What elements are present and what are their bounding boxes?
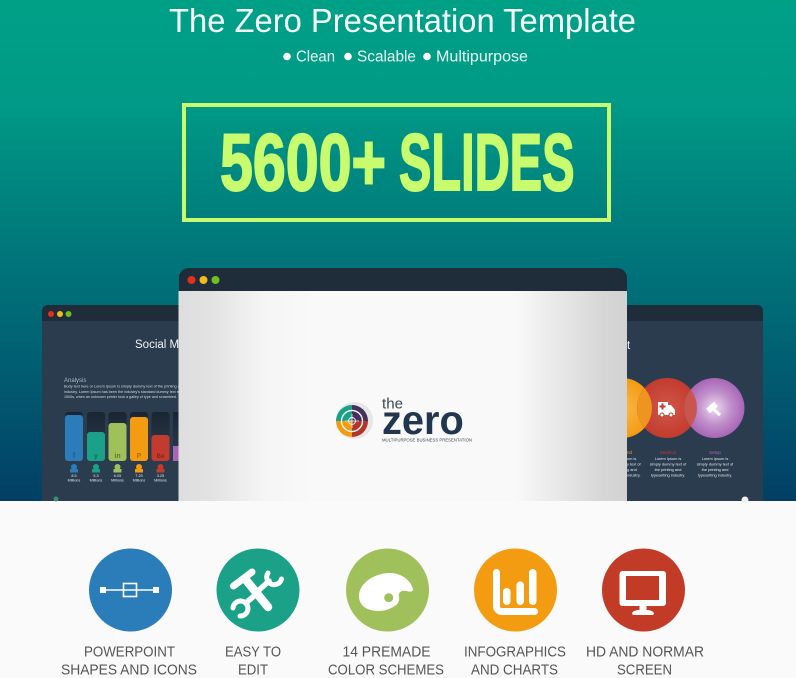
- subtitle bullets: Multipurpose: [436, 48, 528, 66]
- subtitle bullets: [283, 48, 528, 66]
- medical caption: Lorem Ipsum is: [655, 456, 681, 461]
- subtitle bullets: Clean: [296, 48, 335, 66]
- logo wordmark: the: [382, 396, 403, 412]
- setup caption: simply dummy text of: [697, 462, 734, 466]
- medical caption: Medical: [660, 450, 676, 455]
- analysis text: industry. Lorem Ipsum has been the industry's standard dummy text ever: [64, 390, 185, 394]
- purple circle: [684, 378, 744, 438]
- left slide window: [42, 305, 201, 502]
- zero logo: [336, 396, 472, 443]
- feature: infographics: [464, 548, 566, 678]
- label: [586, 644, 704, 678]
- orange caption: y text of: [627, 462, 642, 466]
- medical caption: simply dummy text of: [650, 462, 687, 466]
- title: The Zero Presentation Template: [169, 2, 636, 39]
- feature: colour schemes: [328, 548, 444, 678]
- setup caption: Setup: [709, 450, 721, 455]
- logo target mark: [336, 402, 373, 439]
- orange circle: [592, 378, 652, 438]
- audience figures: Millions: [68, 478, 80, 482]
- zero logo: MULTIPURPOSE BUSINESS PRESENTATION: [382, 437, 472, 442]
- audience figures: Millions: [154, 478, 167, 482]
- icon: hammer and wrench: [216, 548, 300, 632]
- audience figures: 5.3: [93, 474, 99, 478]
- social bar chart: Be: [157, 454, 165, 460]
- setup caption: Lorem Ipsum is: [702, 456, 728, 461]
- zero logo: zero: [382, 396, 464, 443]
- feature: powerpoint shapes: [61, 548, 197, 678]
- orange caption: ndustry.: [627, 472, 641, 478]
- social bar chart: y: [94, 453, 98, 460]
- right slide window: [592, 305, 763, 504]
- social bar chart: P: [137, 453, 142, 460]
- audience figures: 7.25: [135, 474, 143, 478]
- orange caption: um is: [627, 456, 636, 461]
- audience figures: Millions: [111, 478, 124, 482]
- setup caption: [697, 450, 734, 478]
- audience figures: 8.5: [71, 474, 77, 478]
- medical caption: [650, 450, 687, 478]
- headline box: [184, 105, 609, 220]
- analysis text: [64, 378, 185, 399]
- icon: ambulance: [658, 402, 675, 417]
- analysis text: Analysis: [64, 378, 86, 384]
- window controls: [188, 276, 220, 284]
- analysis text: 1500s, when an unknown printer took a galley of type and scrambled.: [64, 395, 177, 399]
- icon: bar chart: [474, 548, 557, 632]
- label: INFOGRAPHICS: [464, 644, 566, 660]
- label: EASY TO: [225, 644, 281, 660]
- headline word: SLIDES: [399, 118, 575, 208]
- feature: easy to edit: [216, 548, 300, 678]
- label: POWERPOINT: [84, 644, 175, 660]
- social bar chart: [65, 412, 182, 461]
- label: 14 PREMADE: [342, 644, 431, 660]
- subtitle bullets: Scalable: [357, 48, 416, 66]
- label: HD AND NORMAR: [586, 644, 704, 660]
- audience figures: [68, 464, 167, 482]
- icon: gavel: [708, 404, 720, 415]
- window controls: [48, 311, 72, 317]
- overlap of red and purple: [685, 390, 697, 426]
- orange caption: g and: [627, 467, 637, 472]
- orange caption: nd: [627, 450, 633, 455]
- audience figures: Millions: [133, 478, 145, 482]
- small logo: [54, 496, 58, 502]
- icon: palette: [346, 548, 429, 632]
- social bar chart: in: [114, 453, 121, 460]
- audience figures: 3.25: [157, 474, 164, 478]
- page badge: [742, 496, 748, 504]
- audience figures: Millions: [90, 478, 102, 482]
- icon: vector shape: [89, 548, 172, 632]
- icon: monitor: [602, 548, 685, 632]
- headline number: 5600+: [220, 118, 386, 208]
- setup caption: the printing and: [702, 467, 728, 472]
- medical caption: the printing and: [655, 467, 681, 472]
- red circle: [637, 378, 697, 438]
- slide heading: Social Media: [135, 339, 201, 351]
- gradient header background: [0, 0, 796, 501]
- label: [61, 644, 197, 678]
- medical caption: typesetting industry.: [651, 472, 685, 478]
- white footer background: [0, 501, 796, 678]
- feature: hd screen: [586, 548, 704, 678]
- social bar chart: f: [73, 451, 76, 460]
- label: [328, 644, 444, 678]
- analysis text: Body text here or Lorem Ipsum is simply dummy text of the printing and: [64, 384, 184, 388]
- label: [225, 644, 281, 678]
- label: [464, 644, 566, 678]
- overlap of orange and red: [637, 388, 652, 428]
- audience figures: 6.05: [114, 474, 121, 478]
- setup caption: typesetting industry.: [698, 472, 732, 478]
- orange caption: [627, 450, 642, 478]
- centre slide window: [178, 268, 627, 501]
- slide title fragment: t: [627, 340, 631, 352]
